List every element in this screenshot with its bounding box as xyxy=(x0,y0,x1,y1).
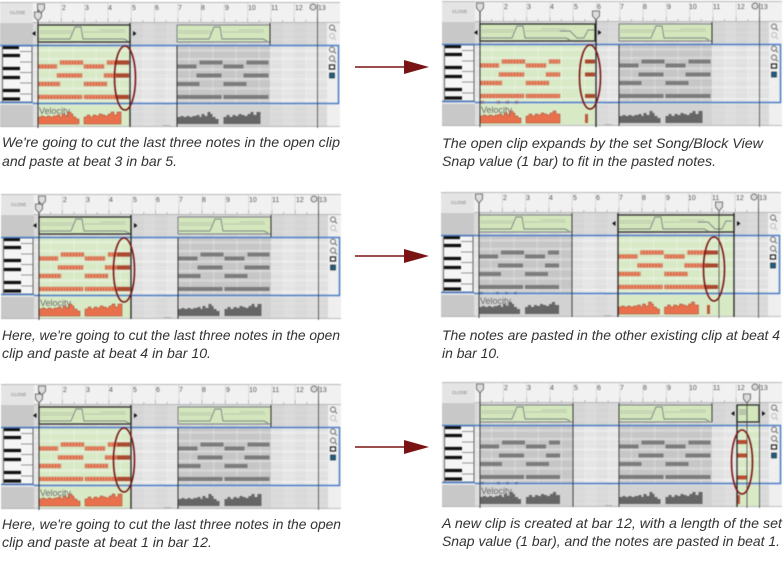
panel: clip expanded by one bar xyxy=(442,1,782,127)
arrangement clips xyxy=(33,217,271,234)
piano roll: closed clips and new clip xyxy=(475,426,769,506)
ruler bar numbers: 2 xyxy=(63,197,67,204)
ruler bar numbers: 8 xyxy=(202,197,206,204)
ruler bar numbers: 7 xyxy=(178,5,182,12)
caption 4: in bar 10. xyxy=(442,345,500,361)
ruler bar numbers: 8 xyxy=(201,5,205,12)
ruler bar numbers: 8 xyxy=(643,385,647,392)
ruler bar numbers: 8 xyxy=(642,195,646,202)
ruler bar numbers: 6 xyxy=(156,387,160,394)
label: close button: CLOSE xyxy=(10,10,25,15)
ruler bar numbers: 3 xyxy=(527,4,531,11)
ruler bar numbers: 11 xyxy=(271,5,278,12)
pasted notes xyxy=(585,60,595,98)
panel: new clip created at bar 12 xyxy=(442,382,782,508)
cut notes highlighted xyxy=(117,252,130,291)
arrangement clips xyxy=(480,405,766,422)
velocity lane xyxy=(39,298,262,316)
ruler bar numbers: 4 xyxy=(108,5,112,12)
piano roll: open and closed clip regions xyxy=(33,46,327,126)
locators xyxy=(36,386,317,403)
velocity lane: Velocity xyxy=(40,298,72,308)
ruler bar numbers: 4 xyxy=(550,385,554,392)
ruler bar numbers: 12 xyxy=(737,385,745,392)
panel: notes pasted in existing clip xyxy=(441,192,781,318)
caption 3: Here, we're going to cut the last three notes in the open xyxy=(2,327,340,343)
ruler bar numbers: 6 xyxy=(596,195,600,202)
ruler bar numbers: 9 xyxy=(667,385,671,392)
velocity lane: Velocity xyxy=(40,488,72,498)
label: close button: CLOSE xyxy=(452,9,467,14)
panel: open clip before cut, paste at bar 10 xyxy=(1,194,341,320)
ruler bar numbers: 12 xyxy=(295,5,303,12)
ruler bar numbers: 3 xyxy=(526,195,530,202)
ruler bar numbers: 4 xyxy=(109,197,113,204)
ruler bar numbers: 13 xyxy=(318,5,326,12)
ruler bar numbers: 9 xyxy=(225,5,229,12)
caption 1 xyxy=(2,134,340,169)
ruler bar numbers: 2 xyxy=(63,387,67,394)
ruler bar numbers: 5 xyxy=(133,387,137,394)
label: close button: CLOSE xyxy=(11,202,26,207)
velocity lane: Velocity xyxy=(480,296,512,306)
ruler bar numbers: 4 xyxy=(109,387,113,394)
ruler bar numbers: 5 xyxy=(573,195,577,202)
caption 1: We're going to cut the last three notes in the open clip xyxy=(2,134,340,150)
ruler bar numbers: 11 xyxy=(272,197,279,204)
velocity lane: Velocity xyxy=(481,105,513,115)
ruler bar numbers: 9 xyxy=(666,195,670,202)
ruler bar numbers: 6 xyxy=(597,385,601,392)
ruler bar numbers: 10 xyxy=(248,5,256,12)
caption 3: clip and paste at beat 4 in bar 10. xyxy=(2,345,211,361)
cut notes highlighted xyxy=(116,60,129,99)
ruler bar numbers: 8 xyxy=(643,4,647,11)
ruler bar numbers: 11 xyxy=(272,387,279,394)
ruler bar numbers: 6 xyxy=(597,4,601,11)
ruler bar numbers: 8 xyxy=(202,387,206,394)
ruler bar numbers: 13 xyxy=(759,195,767,202)
highlight ellipse xyxy=(732,430,752,494)
ruler bar numbers: 10 xyxy=(249,387,257,394)
ruler bar numbers: 5 xyxy=(574,385,578,392)
caption 1: and paste at beat 3 in bar 5. xyxy=(2,153,177,169)
ruler bar numbers: 9 xyxy=(667,4,671,11)
ruler bar numbers: 7 xyxy=(620,4,624,11)
locators xyxy=(36,196,317,213)
ruler bar numbers: 10 xyxy=(689,4,697,11)
ruler bar numbers: 2 xyxy=(504,4,508,11)
locators xyxy=(34,4,316,21)
ruler bar numbers: 5 xyxy=(132,5,136,12)
ruler bar numbers: 13 xyxy=(319,387,327,394)
velocity lane xyxy=(480,486,740,504)
ruler bar numbers: 7 xyxy=(179,387,183,394)
locators xyxy=(476,194,757,211)
piano roll: open and closed clip regions xyxy=(34,238,328,318)
ruler bar numbers: 7 xyxy=(619,195,623,202)
velocity lane: Velocity xyxy=(39,106,71,116)
caption 3 xyxy=(2,327,340,361)
highlight ellipse xyxy=(704,237,724,301)
pasted notes xyxy=(737,440,747,480)
ruler bar numbers: 13 xyxy=(760,385,768,392)
label: close button: CLOSE xyxy=(452,390,467,395)
piano roll: open and closed clip regions xyxy=(34,428,328,508)
caption 4 xyxy=(442,327,780,361)
ruler bar numbers: 12 xyxy=(296,197,304,204)
ruler bar numbers: 2 xyxy=(504,385,508,392)
caption 6: Snap value (1 bar), and the notes are pasted in beat 1. xyxy=(442,533,780,549)
velocity lane: Velocity xyxy=(481,486,513,496)
caption 2: Snap value (1 bar) to fit in the pasted notes. xyxy=(442,153,716,169)
caption 6 xyxy=(441,515,783,549)
locators xyxy=(476,3,758,20)
label: close button: CLOSE xyxy=(11,392,26,397)
caption 4: The notes are pasted in the other existing clip at beat 4 xyxy=(442,327,780,343)
ruler bar numbers: 2 xyxy=(62,5,66,12)
arrangement clips xyxy=(479,215,740,232)
highlight ellipse xyxy=(114,46,136,110)
panel: open clip before cut, paste at bar 12 xyxy=(1,384,341,510)
ruler bar numbers: 5 xyxy=(574,4,578,11)
velocity lane xyxy=(480,105,702,123)
arrow 3 xyxy=(355,440,429,454)
ruler bar numbers: 9 xyxy=(226,197,230,204)
ruler bar numbers: 6 xyxy=(156,197,160,204)
ruler bar numbers: 11 xyxy=(712,195,719,202)
ruler bar numbers: 10 xyxy=(689,385,697,392)
ruler bar numbers: 3 xyxy=(85,5,89,12)
velocity lane xyxy=(38,106,260,124)
caption 5: Here, we're going to cut the last three notes in the open xyxy=(2,516,341,532)
ruler bar numbers: 12 xyxy=(737,4,745,11)
ruler bar numbers: 11 xyxy=(713,4,720,11)
ruler bar numbers: 13 xyxy=(319,197,327,204)
arrangement clips xyxy=(474,24,712,41)
caption 5: clip and paste at beat 1 in bar 12. xyxy=(2,534,212,550)
arrangement clips xyxy=(32,25,270,42)
caption 2: The open clip expands by the set Song/Block View xyxy=(442,135,764,151)
ruler bar numbers: 3 xyxy=(86,197,90,204)
highlight ellipse xyxy=(114,238,134,302)
ruler bar numbers: 7 xyxy=(179,197,183,204)
panel: open clip before cut, paste at bar 5 xyxy=(0,2,340,128)
highlight ellipse xyxy=(114,428,134,492)
ruler bar numbers: 12 xyxy=(736,195,744,202)
ruler bar numbers: 10 xyxy=(688,195,696,202)
velocity lane xyxy=(479,296,710,314)
caption 5 xyxy=(2,516,341,550)
ruler bar numbers: 10 xyxy=(249,197,257,204)
ruler bar numbers: 3 xyxy=(527,385,531,392)
arrangement clips xyxy=(33,407,271,424)
ruler bar numbers: 3 xyxy=(86,387,90,394)
caption 6: A new clip is created at bar 12, with a length of the set xyxy=(441,515,783,531)
piano roll: closed clip and open clip xyxy=(474,236,768,316)
arrow 2 xyxy=(355,249,429,263)
ruler bar numbers: 7 xyxy=(620,385,624,392)
ruler bar numbers: 12 xyxy=(296,387,304,394)
ruler bar numbers: 9 xyxy=(226,387,230,394)
ruler bar numbers: 13 xyxy=(760,4,768,11)
ruler bar numbers: 2 xyxy=(503,195,507,202)
ruler bar numbers: 11 xyxy=(713,385,720,392)
label: close button: CLOSE xyxy=(451,200,466,205)
ruler bar numbers: 6 xyxy=(155,5,159,12)
highlight ellipse xyxy=(580,45,600,109)
piano roll: expanded open clip and closed clip xyxy=(475,45,769,125)
cut notes highlighted xyxy=(117,442,130,481)
pasted notes xyxy=(705,250,718,289)
arrow 1 xyxy=(355,60,429,74)
caption 2 xyxy=(442,135,764,169)
ruler bar numbers: 4 xyxy=(549,195,553,202)
velocity lane xyxy=(39,488,262,506)
locators xyxy=(476,384,758,403)
ruler bar numbers: 4 xyxy=(550,4,554,11)
ruler bar numbers: 5 xyxy=(133,197,137,204)
